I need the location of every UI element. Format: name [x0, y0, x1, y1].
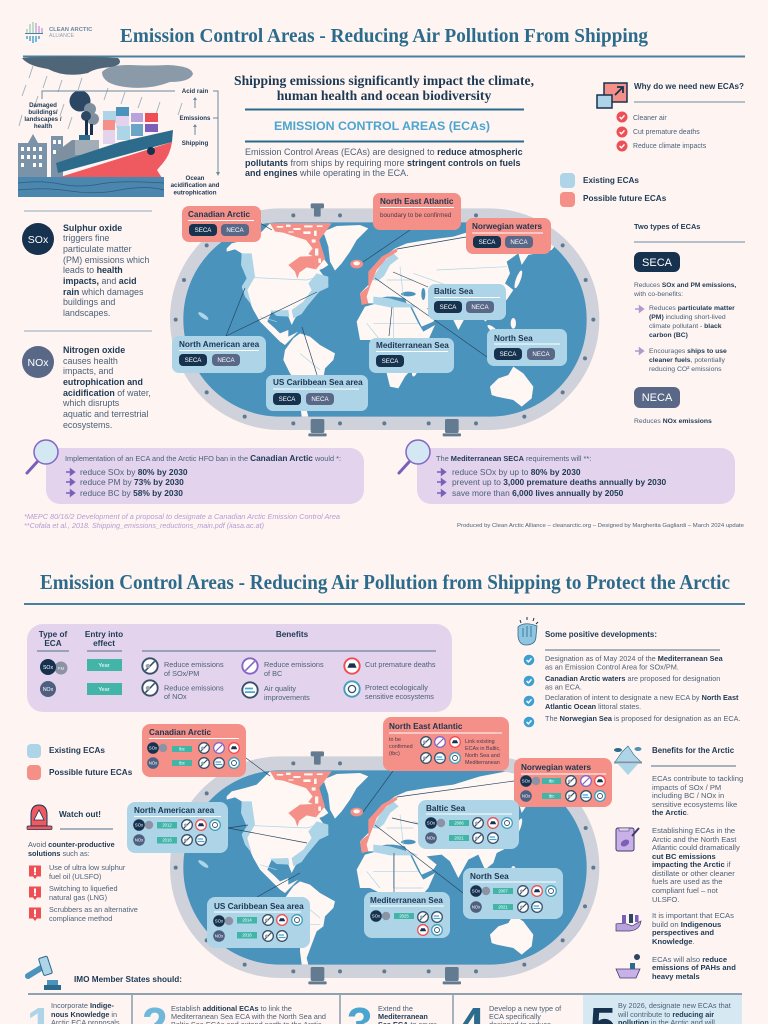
callout: North Sea: NECA — [532, 351, 550, 358]
icon: ship — [56, 107, 173, 178]
panel: watch out: Scrubbers as an alternative — [49, 905, 138, 914]
panel: SECA: climate pollutant - black — [649, 323, 722, 330]
heading: shipping emissions: Shipping emissions significantly impact the climate, — [234, 73, 534, 88]
icon: rain — [19, 66, 182, 129]
panel: key to ECA benefits: of SOx/PM — [164, 669, 199, 678]
panel: key to ECA benefits: Reduce emissions — [164, 684, 224, 692]
panel: Canadian Arctic impact — [27, 440, 364, 504]
panel: key to ECA benefits: Type of — [39, 630, 68, 639]
callout: Baltic Sea: Baltic Sea — [434, 287, 474, 296]
callout: North Sea dates — [463, 868, 563, 919]
flow diagram labels: Acid rain — [182, 88, 208, 95]
callout: Mediterranean Sea dates: 2025 — [399, 914, 409, 918]
flow diagram labels: health — [34, 123, 52, 130]
icon: SOx: SOx — [28, 234, 49, 246]
panel: benefits for the Arctic: Arctic and the North East — [652, 835, 737, 844]
callout: North Sea: SECA — [500, 351, 517, 358]
illustration: ship emissions causes and effects — [18, 56, 220, 197]
icon: NOx: NOx — [28, 357, 49, 369]
panel: SOx — [22, 211, 152, 318]
panel: benefits for the Arctic: impacts of SOx / PM — [652, 783, 721, 792]
panel: NOx — [22, 331, 152, 430]
list: positive developments — [524, 654, 741, 727]
panel: NOx: aquatic and terrestrial — [63, 409, 148, 419]
world map: bottom — [170, 751, 599, 984]
panel: key to ECA benefits: SOx — [43, 665, 53, 671]
callout: North American area: North American area — [179, 340, 260, 349]
panel: key to ECA benefits: Protect ecologically — [365, 683, 428, 692]
callout: North East Atlantic dates: North Sea and — [465, 753, 500, 759]
legend — [560, 173, 667, 207]
panel: benefits for the Arctic: perspectives and — [652, 928, 714, 937]
callout: US Caribbean Sea area: SECA — [279, 396, 296, 403]
icon: fuel can — [616, 828, 639, 851]
recommendation 5 — [583, 995, 742, 1024]
callout: North Sea dates: 2007 — [498, 888, 508, 894]
panel: watch out: Watch out! — [59, 810, 101, 819]
panel: key to ECA benefits: NOx — [43, 687, 54, 693]
callout: Mediterranean Sea — [369, 338, 454, 373]
recommendation 3: Extend the — [378, 1004, 413, 1013]
panel: benefits for the Arctic: Atlantic could dramatically — [652, 843, 740, 852]
icon: high five hand — [518, 617, 538, 645]
callout: North East Atlantic dates: ECAs in Baltic, — [465, 746, 501, 752]
panel: benefits for the Arctic: fuels are used as the — [652, 877, 722, 886]
list: positive developments: Atlantic Ocean littoral states. — [545, 702, 641, 711]
text: ECA definition — [245, 147, 523, 178]
panel: key to ECA benefits: Reduce emissions — [164, 660, 224, 669]
recommendation 4: Develop a new type of — [489, 1004, 562, 1013]
panel: benefits for the Arctic: ULSFO. — [652, 895, 679, 904]
list: reasons: Reduce climate impacts — [633, 143, 707, 150]
text: ECA definition: pollutants from ships by requiring more stringent controls on fuels — [245, 158, 521, 168]
icon: water — [18, 177, 164, 197]
panel: NOx: causes health — [63, 356, 118, 366]
panel: benefits for the Arctic: ECAs contribute to tackling — [652, 774, 743, 783]
panel: benefits for the Arctic: sensitive ecosystems like — [652, 800, 737, 809]
list: positive developments: Designation as of May 2024 of the Mediterranean Sea — [545, 654, 724, 663]
callout: North American area dates: 2012 — [162, 823, 172, 828]
panel: Mediterranean impact — [399, 440, 735, 504]
icon: small ship — [616, 954, 640, 978]
panel: NECA — [634, 387, 712, 425]
callout: North American area: NECA — [217, 357, 235, 364]
panel: benefits for the Arctic: Benefits for the Arctic — [652, 746, 735, 755]
callout: North East Atlantic dates: Mediterranean — [465, 760, 500, 766]
callout: Canadian Arctic dates: Canadian Arctic — [149, 728, 211, 737]
panel: key to ECA benefits: of BC — [264, 669, 282, 678]
callout: North American area dates: North American area — [134, 806, 215, 815]
callout: North Sea — [487, 329, 567, 366]
callout: Norwegian waters dates: Norwegian waters — [521, 763, 592, 772]
callout: North East Atlantic dates — [383, 717, 509, 771]
callout: Baltic Sea: NECA — [471, 304, 489, 311]
flow diagram labels: acidification and — [171, 182, 220, 189]
panel: NECA: Reduces NOx emissions — [634, 418, 712, 425]
panel: watch out: compliance method — [49, 914, 112, 923]
callout: North American area: SECA — [185, 357, 202, 364]
list: reasons — [616, 112, 707, 152]
callout: North East Atlantic: North East Atlantic — [380, 197, 454, 206]
recommendation 1: Incorporate Indige- — [51, 1001, 114, 1010]
panel: key to ECA benefits: improvements — [264, 693, 310, 702]
panel: watch out: natural gas (LNG) — [49, 893, 107, 902]
flow diagram labels: landscapes / — [24, 116, 62, 123]
recommendation 1 — [27, 995, 132, 1024]
flow diagram labels: buildings/ — [28, 109, 58, 116]
panel: SECA: carbon (BC) — [649, 332, 688, 339]
list: positive developments: Declaration of intent to designate a new ECA by North East — [545, 693, 739, 702]
callout: North East Atlantic dates: confirmed — [389, 744, 413, 750]
panel: SECA: reducing CO² emissions — [649, 366, 722, 373]
recommendation 4: ECA specifically — [489, 1012, 541, 1021]
list: reasons: Cleaner air — [633, 115, 667, 122]
title: Emission Control Areas - Reducing Air Pollution From Shipping — [120, 26, 648, 47]
callout: Mediterranean Sea dates — [364, 892, 450, 938]
panel: benefits for the Arctic: impacting the Arctic if — [652, 860, 732, 869]
panel: key to ECA benefits: ECA — [44, 639, 62, 648]
panel: SECA: cleaner fuels, potentially — [649, 357, 726, 364]
panel: key to ECA benefits: PM — [58, 666, 65, 671]
callout: US Caribbean Sea area dates — [207, 897, 310, 948]
icon: storm clouds — [22, 56, 193, 88]
panel: key to ECA benefits: Air quality — [264, 684, 296, 693]
panel: SOx: Sulphur oxide — [63, 223, 122, 233]
callout: North Sea dates: 2021 — [498, 904, 508, 910]
panel: NOx: eutrophication and — [63, 377, 143, 387]
legend: Existing ECAs — [583, 176, 639, 185]
recommendation 3 — [347, 995, 453, 1024]
callout: US Caribbean Sea area dates: 2016 — [242, 933, 252, 938]
panel: NOx: impacts, and — [63, 366, 113, 376]
panel: key to ECA benefits — [27, 624, 452, 712]
callout: Canadian Arctic: Canadian Arctic — [188, 210, 250, 219]
icon: magnifier — [399, 440, 430, 473]
panel: benefits for the Arctic: distillate or other cleaner — [652, 869, 735, 878]
flow diagram labels: Damaged — [29, 102, 57, 109]
panel: SOx: rain which damages — [63, 287, 144, 297]
panel: watch out: fuel oil (ULSFO) — [49, 872, 101, 881]
callout: Mediterranean Sea: Mediterranean Sea — [376, 341, 449, 350]
flow diagram labels: Emissions — [180, 115, 211, 122]
panel: Mediterranean impact: prevent up to 3,000 premature deaths annually by 2030 — [452, 477, 666, 487]
panel: SOx: leads to health — [63, 265, 123, 275]
panel: watch out: solutions such as: — [28, 849, 90, 858]
callout: Canadian Arctic dates — [142, 724, 246, 777]
panel: benefits for the Arctic: emissions of PAHs and — [652, 963, 736, 972]
callout: Norwegian waters — [466, 218, 551, 254]
logo: Clean Arctic Alliance — [25, 22, 93, 43]
flow diagram labels: Shipping — [182, 140, 208, 147]
logo: Clean Arctic Alliance: ALLIANCE — [49, 33, 75, 39]
panel: key to ECA benefits: Entry into — [85, 630, 123, 639]
callout: North American area dates: 2016 — [162, 838, 172, 843]
leader lines: bottom map — [228, 758, 514, 897]
panel: benefits for the Arctic: build on Indigenous — [652, 920, 721, 929]
legend: part 2: Possible future ECAs — [49, 768, 133, 777]
recommendation 5: will contribute to reducing air — [617, 1010, 714, 1019]
panel: watch out: Switching to liquefied — [49, 884, 118, 893]
flow diagram labels: Ocean — [186, 175, 205, 182]
footnotes — [24, 512, 340, 530]
panel: benefits for the Arctic: heavy metals — [652, 972, 700, 981]
panel: key to ECA benefits: Reduce emissions — [264, 660, 324, 669]
recommendation 5: By 2026, designate new ECAs that — [618, 1001, 731, 1010]
recommendation 2: Establish additional ECAs to link the — [171, 1004, 292, 1013]
panel: NOx: Nitrogen oxide — [63, 345, 125, 355]
heading: shipping emissions — [234, 73, 534, 103]
panel: SOx: particulate matter — [63, 244, 132, 254]
panel: key to ECA benefits: Benefits — [276, 630, 309, 639]
list: reasons: Cut premature deaths — [633, 129, 700, 136]
panel: Canadian Arctic impact: reduce SOx by 80% by 2030 — [80, 467, 188, 477]
panel: NOx: ecosystems. — [63, 420, 112, 430]
world map: top — [170, 203, 599, 436]
legend: part 2: Existing ECAs — [49, 746, 105, 755]
callout: US Caribbean Sea area: US Caribbean Sea area — [273, 378, 363, 387]
text: ECA definition: and engines while operating in the ECA. — [245, 168, 409, 178]
list: positive developments: as an ECA. — [545, 682, 582, 692]
panel: Mediterranean impact: The Mediterranean SECA requirements will **: — [436, 454, 591, 463]
panel: SECA: Reduces SOx and PM emissions, — [634, 282, 736, 289]
panel: Mediterranean impact: reduce SOx by up to 80% by 2030 — [452, 467, 581, 477]
callout: Norwegian waters: SECA — [479, 239, 496, 246]
flow diagram labels: eutrophication — [174, 190, 217, 196]
icon: magnifier — [27, 440, 58, 473]
heading: positive developments: Some positive developments: — [545, 630, 657, 639]
panel: benefits for the Arctic: Establishing ECAs in the — [652, 826, 735, 835]
recommendation 3: Mediterranean — [378, 1012, 428, 1021]
panel: benefits for the Arctic: the Arctic. — [652, 808, 689, 817]
callout: Norwegian waters dates: tbc — [549, 778, 554, 784]
panel: key to ECA benefits: Cut premature deaths — [365, 660, 436, 669]
panel: SECA: (PM) including short-lived — [649, 314, 726, 321]
list: positive developments: Canadian Arctic waters are proposed for designation — [545, 674, 720, 683]
heading: shipping emissions: human health and ocean biodiversity — [277, 88, 491, 103]
icon: hand with people — [616, 914, 641, 931]
panel: SECA: Encourages ships to use — [649, 348, 727, 355]
callout: Baltic Sea dates: 2006 — [454, 820, 464, 826]
text: ECA definition: Emission Control Areas (ECAs) are designed to reduce atmospheric — [245, 147, 523, 157]
icon: expanding areas — [597, 83, 627, 108]
panel: SECA — [633, 252, 736, 373]
icon: smoke — [70, 90, 99, 135]
callout: Canadian Arctic — [182, 206, 261, 242]
heading: two types: Two types of ECAs — [634, 222, 700, 231]
legend: part 2 — [27, 744, 133, 780]
recommendation 4 — [459, 998, 562, 1024]
callout: Canadian Arctic: SECA — [195, 227, 212, 234]
leader lines: top map — [226, 223, 487, 375]
panel: SECA: with co-benefits: — [633, 291, 683, 298]
icon: gavel — [28, 956, 61, 990]
panel: SECA: SECA — [642, 257, 673, 269]
panel: benefits for the Arctic: ECAs will also reduce — [652, 955, 727, 964]
panel: key to ECA benefits: effect — [93, 639, 115, 648]
panel: SOx: landscapes. — [63, 308, 110, 318]
panel: benefits for the Arctic — [614, 746, 743, 981]
recommendation 1: nous Knowledge in — [51, 1010, 117, 1019]
panel: SOx: triggers fine — [63, 233, 109, 243]
callout: Baltic Sea dates: Baltic Sea — [426, 804, 466, 813]
panel: SOx: buildings and — [63, 297, 115, 307]
icon: iceberg — [614, 746, 642, 775]
panel: NOx: which disrupts — [62, 398, 120, 408]
recommendation 2 — [142, 995, 340, 1024]
panel: Canadian Arctic impact: Implementation of an ECA and the Arctic HFO ban in the Canadian Arctic would *: — [65, 453, 341, 463]
callout: North American area dates — [127, 802, 228, 853]
heading: ECAs: EMISSION CONTROL AREAS (ECAs) — [274, 119, 490, 133]
heading: IMO Member States: IMO Member States should: — [74, 975, 182, 984]
callout: North Sea: North Sea — [494, 334, 533, 343]
recommendation 2: Mediterranean Sea ECA with the North Sea and — [171, 1012, 326, 1021]
callout: North East Atlantic: boundary to be confirmed — [380, 212, 452, 219]
callout: Baltic Sea dates — [418, 800, 519, 849]
panel: NOx: acidification of water, — [63, 388, 151, 398]
panel: Canadian Arctic impact: reduce BC by 58% by 2030 — [80, 488, 183, 498]
panel: NECA: NECA — [642, 392, 673, 404]
callout: Norwegian waters: NECA — [510, 239, 528, 246]
callout: US Caribbean Sea area dates: US Caribbean Sea area — [214, 902, 304, 911]
icon: city buildings — [18, 134, 63, 180]
panel: benefits for the Arctic: Knowledge. — [652, 937, 695, 946]
callout: US Caribbean Sea area — [266, 375, 368, 411]
callout: Baltic Sea: SECA — [440, 304, 457, 311]
callout: Canadian Arctic dates: tbc — [179, 746, 185, 752]
callout: North East Atlantic dates: North East Atlantic — [389, 722, 463, 731]
logo: Clean Arctic Alliance: CLEAN ARCTIC — [49, 27, 93, 33]
callout: North East Atlantic dates: to be — [389, 737, 401, 743]
heading: why new ECAs: Why do we need new ECAs? — [634, 82, 744, 91]
callout: Norwegian waters dates: tbc — [549, 794, 554, 798]
callout: North Sea dates: North Sea — [470, 872, 509, 881]
panel: watch out — [27, 805, 138, 923]
list: positive developments: The Norwegian Sea is proposed for designation as an ECA. — [545, 714, 741, 723]
callout: Canadian Arctic: NECA — [226, 227, 244, 234]
panel: SOx: (PM) emissions which — [63, 255, 149, 265]
panel: benefits for the Arctic: compliant fuel – not — [652, 886, 719, 895]
panel: watch out: Avoid counter-productive — [28, 840, 115, 849]
flow diagram labels — [24, 88, 220, 196]
list: positive developments: as an Emission Control Area for SOx/PM. — [545, 662, 679, 672]
callout: Norwegian waters: Norwegian waters — [472, 222, 543, 231]
callout: North East Atlantic — [373, 193, 461, 230]
callout: Canadian Arctic dates: tbc — [179, 760, 185, 766]
callout: North American area — [172, 336, 266, 373]
footnotes: *MEPC 80/16/2 Development of a proposal to designate a Canadian Arctic Emission Control Area — [24, 512, 340, 521]
panel: benefits for the Arctic: cut BC emissions — [652, 852, 716, 861]
legend: Possible future ECAs — [583, 194, 667, 203]
credit: Produced by Clean Arctic Alliance – cleanarctic.org – Designed by Margherita Gagliardi – March 2024 update — [457, 523, 744, 529]
callout: Baltic Sea — [428, 284, 506, 320]
callout: North East Atlantic dates: (tbc) — [389, 751, 400, 757]
callout: Mediterranean Sea dates: Mediterranean Sea — [370, 896, 443, 905]
panel: Canadian Arctic impact: reduce PM by 73% by 2030 — [80, 477, 184, 487]
panel: key to ECA benefits: Year — [98, 663, 110, 669]
callout: Baltic Sea dates: 2021 — [454, 836, 464, 840]
panel: Mediterranean impact: save more than 6,000 lives annually by 2050 — [452, 488, 624, 498]
panel: SOx: impacts, and acid — [63, 276, 137, 286]
panel: benefits for the Arctic: It is important that ECAs — [652, 911, 734, 920]
callout: North East Atlantic dates: Link existing — [465, 739, 495, 745]
callout: US Caribbean Sea area dates: 2014 — [242, 918, 252, 923]
panel: key to ECA benefits: Year — [98, 687, 110, 693]
panel: key to ECA benefits: of NOx — [164, 692, 187, 701]
callout: Norwegian waters dates — [514, 758, 612, 807]
footnotes: **Cofala et al., 2018. Shipping_emissions_reductions_main.pdf (iiasa.ac.at) — [24, 521, 264, 530]
panel: key to ECA benefits: sensitive ecosystems — [365, 692, 434, 701]
callout: Mediterranean Sea: SECA — [382, 358, 399, 365]
panel: benefits for the Arctic: including BC / NOx in — [652, 791, 724, 800]
panel: watch out: Use of ultra low sulphur — [49, 863, 126, 872]
panel: SECA: Reduces particulate matter — [649, 305, 735, 312]
icon: alarm — [27, 805, 52, 830]
callout: US Caribbean Sea area: NECA — [311, 396, 329, 403]
